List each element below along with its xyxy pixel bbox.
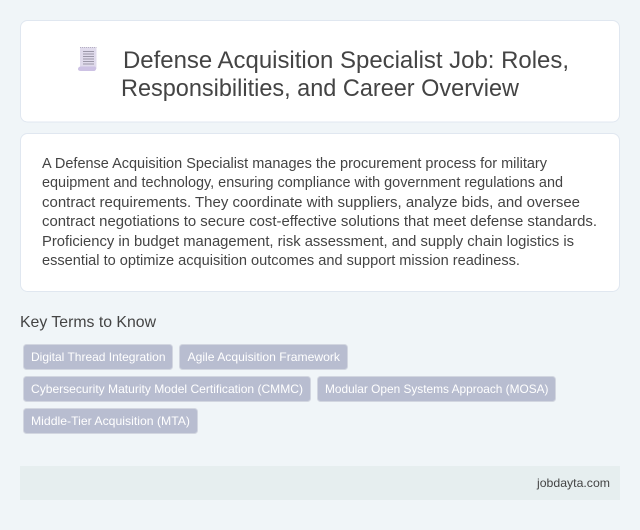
title: Responsibilities, and Career Overview	[121, 75, 520, 102]
tag: agile acquisition: Agile Acquisition Framework	[188, 350, 341, 364]
tag: digital thread	[24, 344, 172, 370]
icon: document scroll	[78, 47, 96, 71]
tag: CMMC	[24, 376, 310, 402]
text block: description: contract negotiations to secure cost-effective solutions that meet defense standards.	[42, 214, 597, 230]
tag: MOSA	[318, 376, 556, 402]
footer	[20, 466, 620, 500]
text block: description: A Defense Acquisition Specialist manages the procurement process for military	[42, 156, 548, 172]
panel: description	[20, 134, 620, 292]
text block: description: essential to optimize acquisition outcomes and support mission readiness.	[42, 253, 520, 269]
tag: agile acquisition	[180, 344, 348, 370]
title: Defense Acquisition Specialist Job: Roles,	[123, 47, 569, 74]
title	[121, 47, 569, 102]
panel: title card	[20, 20, 620, 122]
text block: description: contract requirements. They coordinate with suppliers, analyze bids, and oversee	[42, 195, 580, 211]
tag: MTA	[24, 408, 198, 434]
heading: key terms: Key Terms to Know	[20, 314, 156, 331]
tag: MOSA: Modular Open Systems Approach (MOSA)	[325, 382, 548, 396]
text block: description	[42, 156, 597, 269]
text block: description: equipment and technology, ensuring compliance with government regulations and	[42, 175, 563, 191]
tag: CMMC: Cybersecurity Maturity Model Certification (CMMC)	[31, 382, 303, 396]
tags: key terms	[24, 344, 556, 434]
footer: jobdayta.com	[536, 476, 610, 490]
text block: description: Proficiency in budget management, risk assessment, and supply chain logistics is	[42, 234, 574, 250]
tag: digital thread: Digital Thread Integration	[31, 350, 166, 364]
tag: MTA: Middle-Tier Acquisition (MTA)	[31, 414, 190, 428]
